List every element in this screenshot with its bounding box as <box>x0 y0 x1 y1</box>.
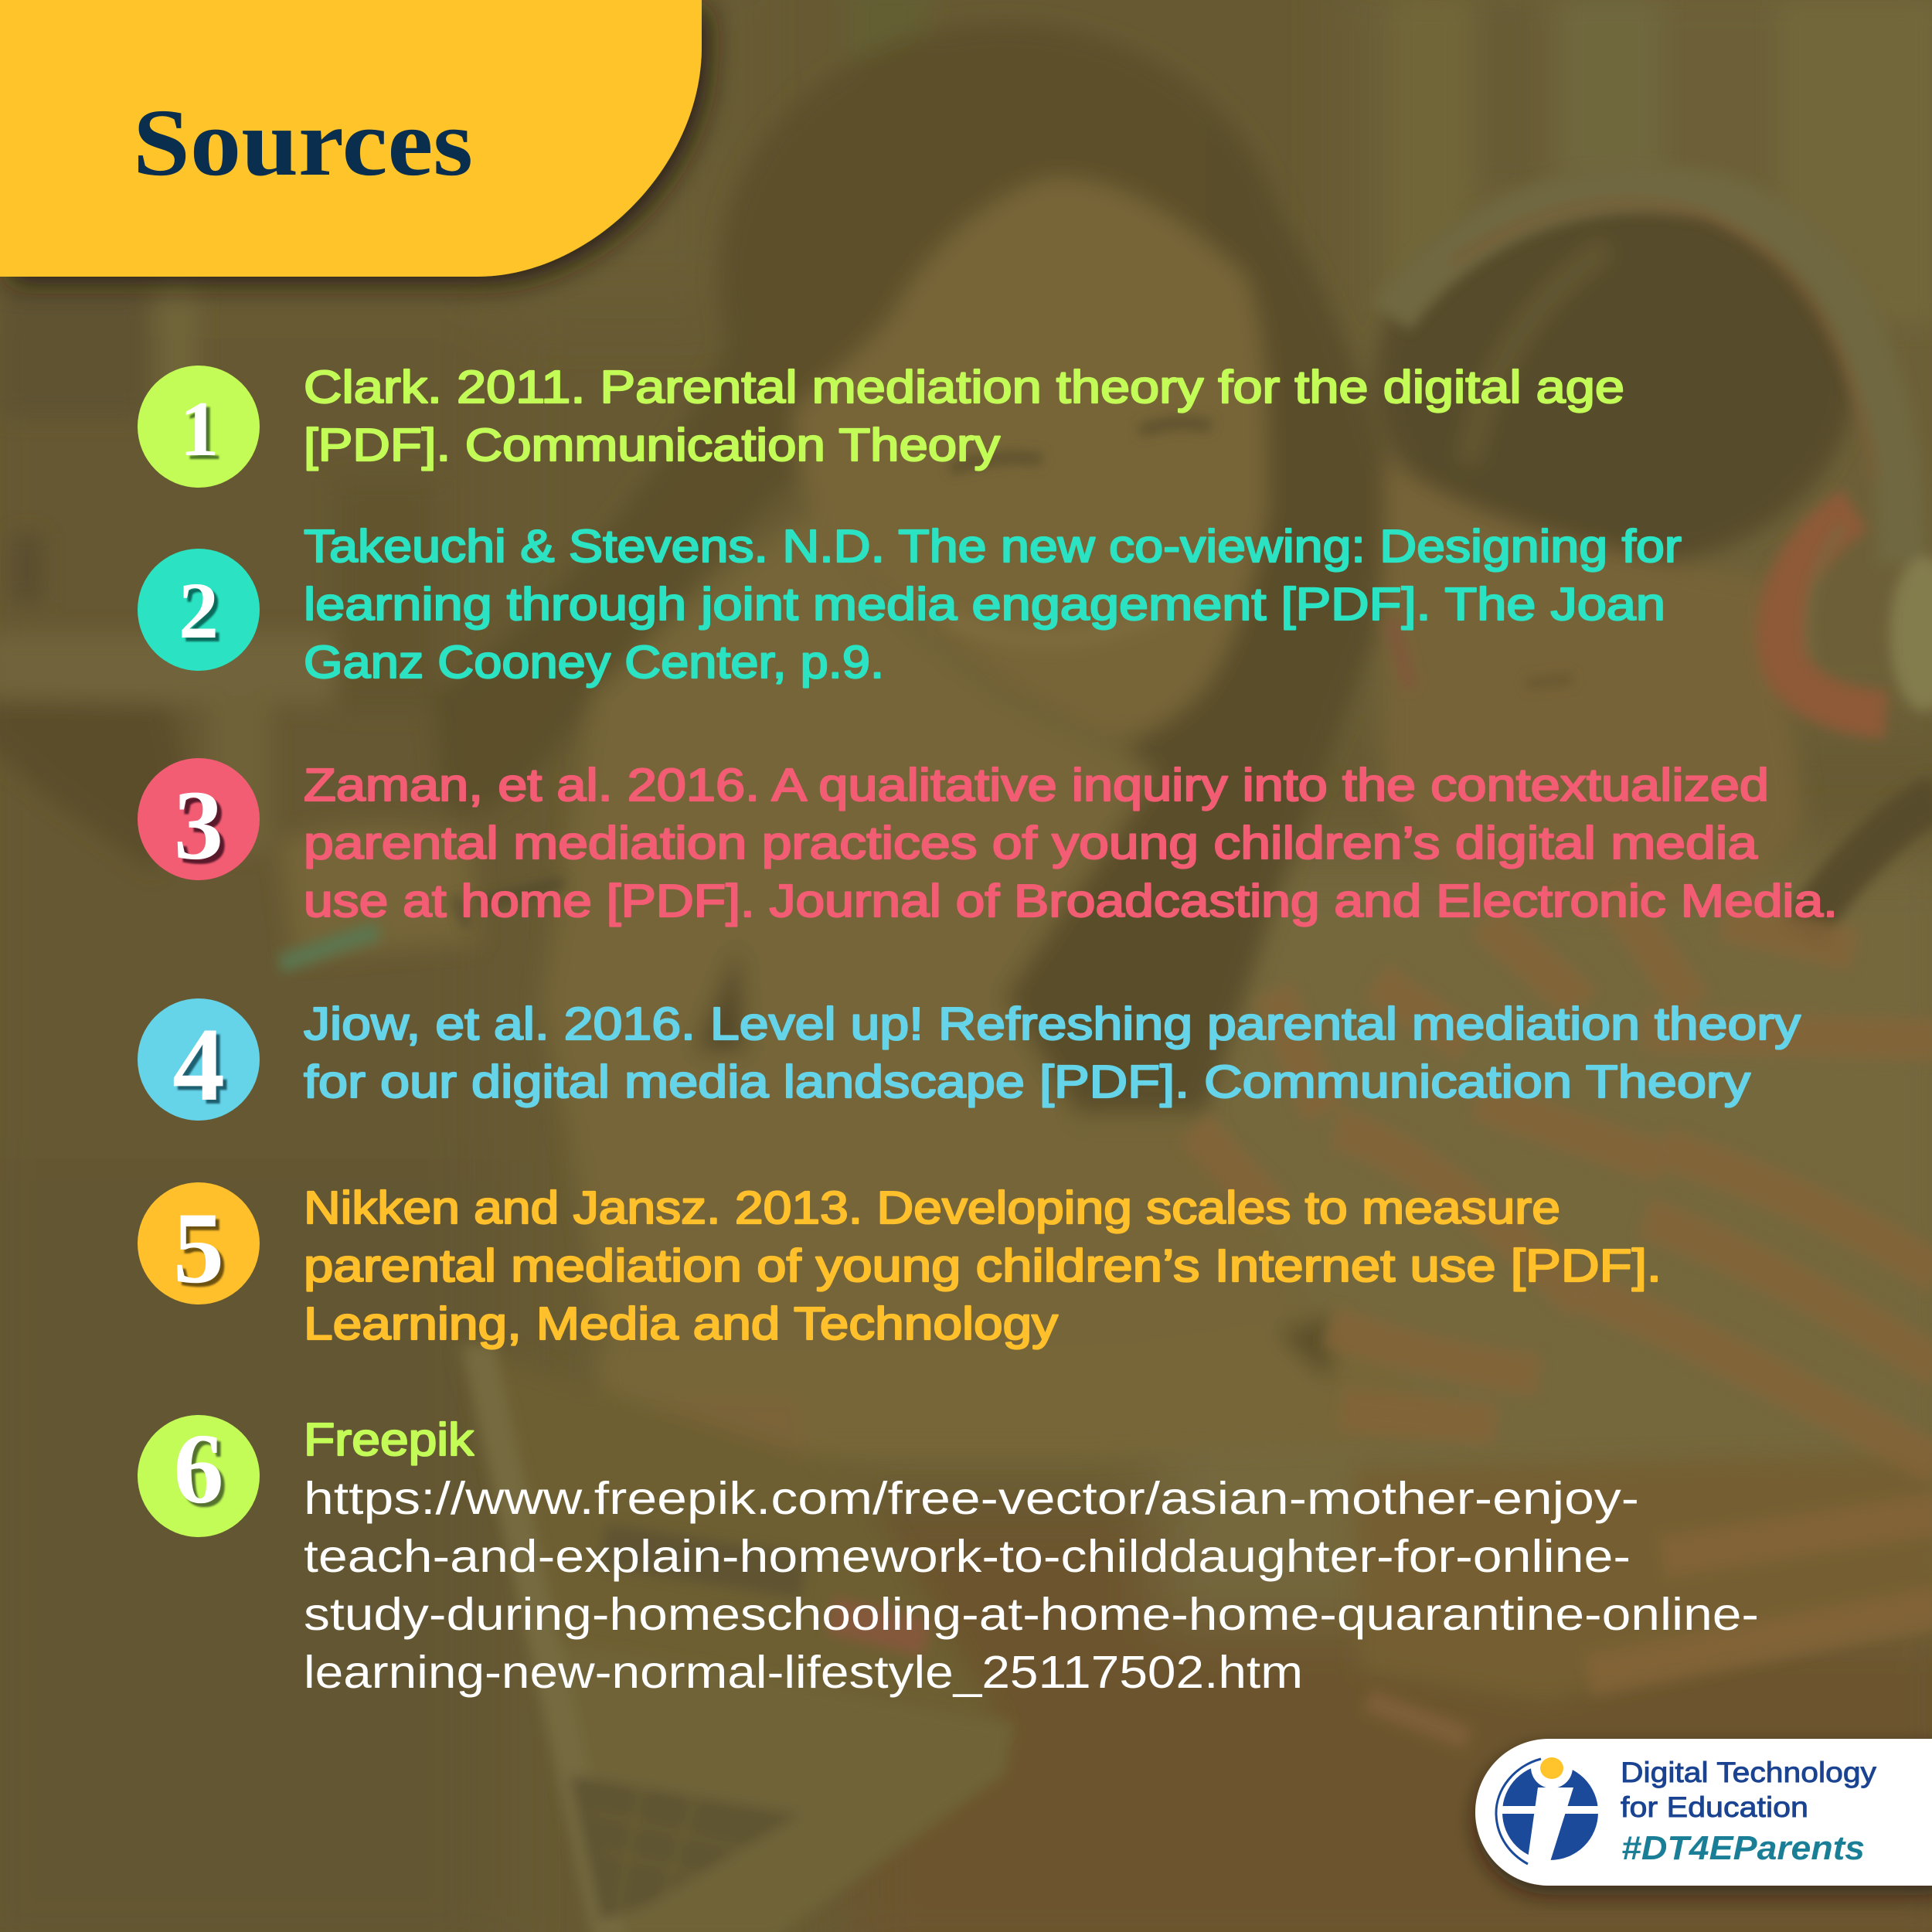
source 6: teach-and-explain-homework-to-childdaughter-for-online- <box>304 1531 1631 1582</box>
logo text <box>1621 1757 1877 1867</box>
source 4: for our digital media landscape [PDF]. Communication Theory <box>304 1056 1751 1107</box>
source 5: Learning, Media and Technology <box>304 1298 1059 1349</box>
source 4: Jiow, et al. 2016. Level up! Refreshing parental mediation theory <box>304 998 1801 1049</box>
laptop <box>462 1345 1014 1932</box>
source 2: Takeuchi & Stevens. N.D. The new co-viewing: Designing for <box>304 521 1682 572</box>
source 6: https://www.freepik.com/free-vector/asian-mother-enjoy- <box>304 1473 1639 1524</box>
source 2: Ganz Cooney Center, p.9. <box>304 637 884 688</box>
header shape with title <box>0 0 702 277</box>
child face <box>1383 456 1802 912</box>
source 5: parental mediation of young children’s Internet use [PDF]. <box>304 1240 1662 1291</box>
source 2: 2 <box>179 566 219 655</box>
icon: DT4E logo <box>1496 1747 1601 1864</box>
source 6 <box>138 1413 1759 1698</box>
title: Sources <box>133 90 473 196</box>
faces <box>1140 423 1211 431</box>
source 6: learning-new-normal-lifestyle_25117502.htm <box>304 1647 1303 1698</box>
source 4: 4 <box>172 1007 225 1123</box>
source 2: learning through joint media engagement [PDF]. The Joan <box>304 579 1665 630</box>
source 5: 5 <box>173 1191 224 1304</box>
headphones band <box>1391 189 1901 564</box>
source 1: 1 <box>179 386 219 473</box>
logo text: #DT4EParents <box>1621 1829 1865 1867</box>
mother hair <box>719 23 1291 533</box>
source 4 <box>138 998 1801 1123</box>
window frames left <box>158 270 197 410</box>
source 1: [PDF]. Communication Theory <box>304 420 1001 471</box>
source 6: 6 <box>173 1413 224 1525</box>
source 3: 3 <box>174 770 223 880</box>
hair strand right <box>1801 796 1932 935</box>
source 3: parental mediation practices of young children’s digital media <box>304 818 1757 869</box>
phone and red item <box>603 1546 804 1577</box>
source 5 <box>138 1182 1662 1349</box>
source 1 <box>138 362 1624 488</box>
logo text: Digital Technology <box>1621 1757 1877 1788</box>
source 3: Zaman, et al. 2016. A qualitative inquiry into the contextualized <box>304 760 1769 811</box>
top right room <box>850 0 927 116</box>
arm in front <box>595 1314 1468 1453</box>
source 6: study-during-homeschooling-at-home-home-quarantine-online- <box>304 1589 1759 1640</box>
source 3 <box>138 758 1838 927</box>
mother face <box>793 178 1267 739</box>
mother neck and chest <box>541 512 1314 1430</box>
lower desk left of laptop <box>462 1345 1005 1731</box>
source 5: Nikken and Jansz. 2013. Developing scales to measure <box>304 1182 1560 1233</box>
source 3: use at home [PDF]. Journal of Broadcasting and Electronic Media. <box>304 876 1838 927</box>
logo badge <box>1475 1739 1932 1886</box>
source 1: Clark. 2011. Parental mediation theory for the digital age <box>304 362 1624 413</box>
logo text: for Education <box>1621 1791 1808 1823</box>
hand near pencil <box>278 825 479 958</box>
headphones ear cup <box>1781 510 1886 715</box>
pencil and homework details <box>280 931 379 964</box>
source 2 <box>138 521 1682 688</box>
source 6: Freepik <box>304 1414 474 1465</box>
shirt stripes <box>1194 896 1932 1675</box>
child hair <box>1376 189 1855 568</box>
